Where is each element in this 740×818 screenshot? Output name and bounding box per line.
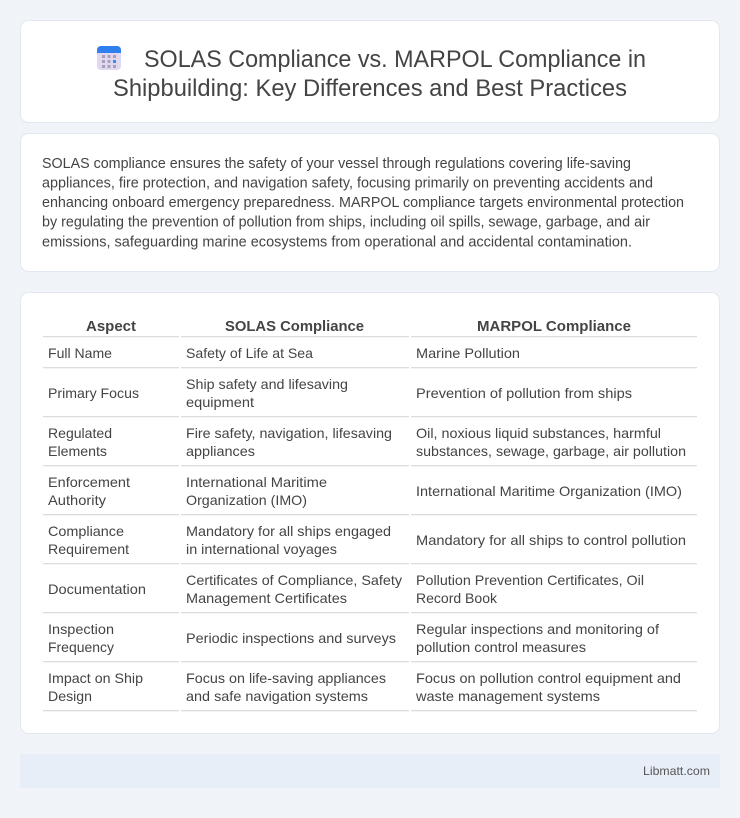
row: impact on ship design: Focus on life-saving appliances [186, 670, 386, 686]
table header: Aspect [86, 319, 136, 335]
table header: MARPOL Compliance [477, 319, 631, 335]
panel: title card [20, 20, 720, 122]
text block: summary paragraph: appliances, fire protection, and navigation safety, focusing primarily on preventing accidents and [42, 176, 653, 192]
row: inspection frequency [48, 621, 659, 655]
row: inspection frequency: Regular inspections and monitoring of [416, 621, 659, 637]
panel: comparison table [20, 292, 720, 734]
row: documentation: Documentation [48, 581, 146, 597]
title: SOLAS Compliance vs. MARPOL Compliance in [144, 46, 646, 73]
row: compliance requirement: in international voyages [186, 541, 337, 557]
row: enforcement authority: Authority [48, 492, 106, 508]
row: documentation: Record Book [416, 590, 498, 606]
row: enforcement authority: Enforcement [48, 474, 130, 490]
row: enforcement authority [48, 474, 682, 508]
footer [20, 754, 720, 788]
icon: calendar [97, 46, 121, 70]
title: Shipbuilding: Key Differences and Best Practices [113, 75, 627, 102]
row: inspection frequency: pollution control measures [416, 639, 586, 655]
panel: summary [20, 134, 720, 272]
row: regulated elements: Regulated [48, 425, 112, 441]
row: full name [48, 345, 520, 361]
row: enforcement authority: Organization (IMO) [186, 492, 307, 508]
row: documentation: Certificates of Compliance, Safety [186, 572, 402, 588]
text block: summary paragraph: emissions, safeguarding marine ecosystems from operational and accidental contamination. [42, 234, 632, 250]
row: primary focus: Ship safety and lifesaving [186, 376, 348, 392]
row: regulated elements [48, 425, 686, 459]
row: regulated elements: substances, sewage, garbage, air pollution [416, 443, 686, 459]
row: full name: Marine Pollution [416, 345, 520, 361]
text block: summary paragraph: SOLAS compliance ensures the safety of your vessel through regulations covering life-saving [42, 156, 631, 172]
row: documentation: Pollution Prevention Certificates, Oil [416, 572, 644, 588]
row: compliance requirement: Compliance [48, 523, 124, 539]
row: inspection frequency: Inspection [48, 621, 114, 637]
row: impact on ship design: Focus on pollution control equipment and [416, 670, 681, 686]
row: primary focus [48, 376, 632, 410]
row: full name: Safety of Life at Sea [186, 345, 313, 361]
row: impact on ship design: Impact on Ship [48, 670, 143, 686]
row: impact on ship design: Design [48, 688, 92, 704]
row: compliance requirement: Mandatory for all ships to control pollution [416, 532, 686, 548]
row: impact on ship design [48, 670, 681, 704]
row: primary focus: Primary Focus [48, 385, 139, 401]
row: inspection frequency: Frequency [48, 639, 114, 655]
row: regulated elements: Oil, noxious liquid substances, harmful [416, 425, 661, 441]
row: compliance requirement: Requirement [48, 541, 129, 557]
text block: summary paragraph: enhancing onboard emergency preparedness. MARPOL compliance targets environmental protection [42, 195, 684, 211]
row: full name: Full Name [48, 345, 112, 361]
text block: summary paragraph [42, 156, 684, 250]
row: regulated elements: Elements [48, 443, 107, 459]
row: enforcement authority: International Maritime [186, 474, 327, 490]
table header: SOLAS Compliance [225, 319, 364, 335]
row: primary focus: Prevention of pollution from ships [416, 385, 632, 401]
row: documentation: Management Certificates [186, 590, 347, 606]
row: primary focus: equipment [186, 394, 254, 410]
row: compliance requirement: Mandatory for all ships engaged [186, 523, 391, 539]
row: impact on ship design: waste management systems [415, 688, 600, 704]
row: regulated elements: appliances [186, 443, 255, 459]
row: inspection frequency: Periodic inspections and surveys [186, 630, 396, 646]
row: enforcement authority: International Maritime Organization (IMO) [416, 483, 682, 499]
text block: summary paragraph: by regulating the prevention of pollution from ships, including oil spills, sewage, garbage, and air [42, 214, 650, 230]
title [113, 46, 646, 102]
row: documentation [48, 572, 644, 606]
row: regulated elements: Fire safety, navigation, lifesaving [186, 425, 392, 441]
row: impact on ship design: and safe navigation systems [186, 688, 368, 704]
table header [86, 319, 631, 335]
row: compliance requirement [48, 523, 686, 557]
footer: Libmatt.com [643, 764, 710, 778]
